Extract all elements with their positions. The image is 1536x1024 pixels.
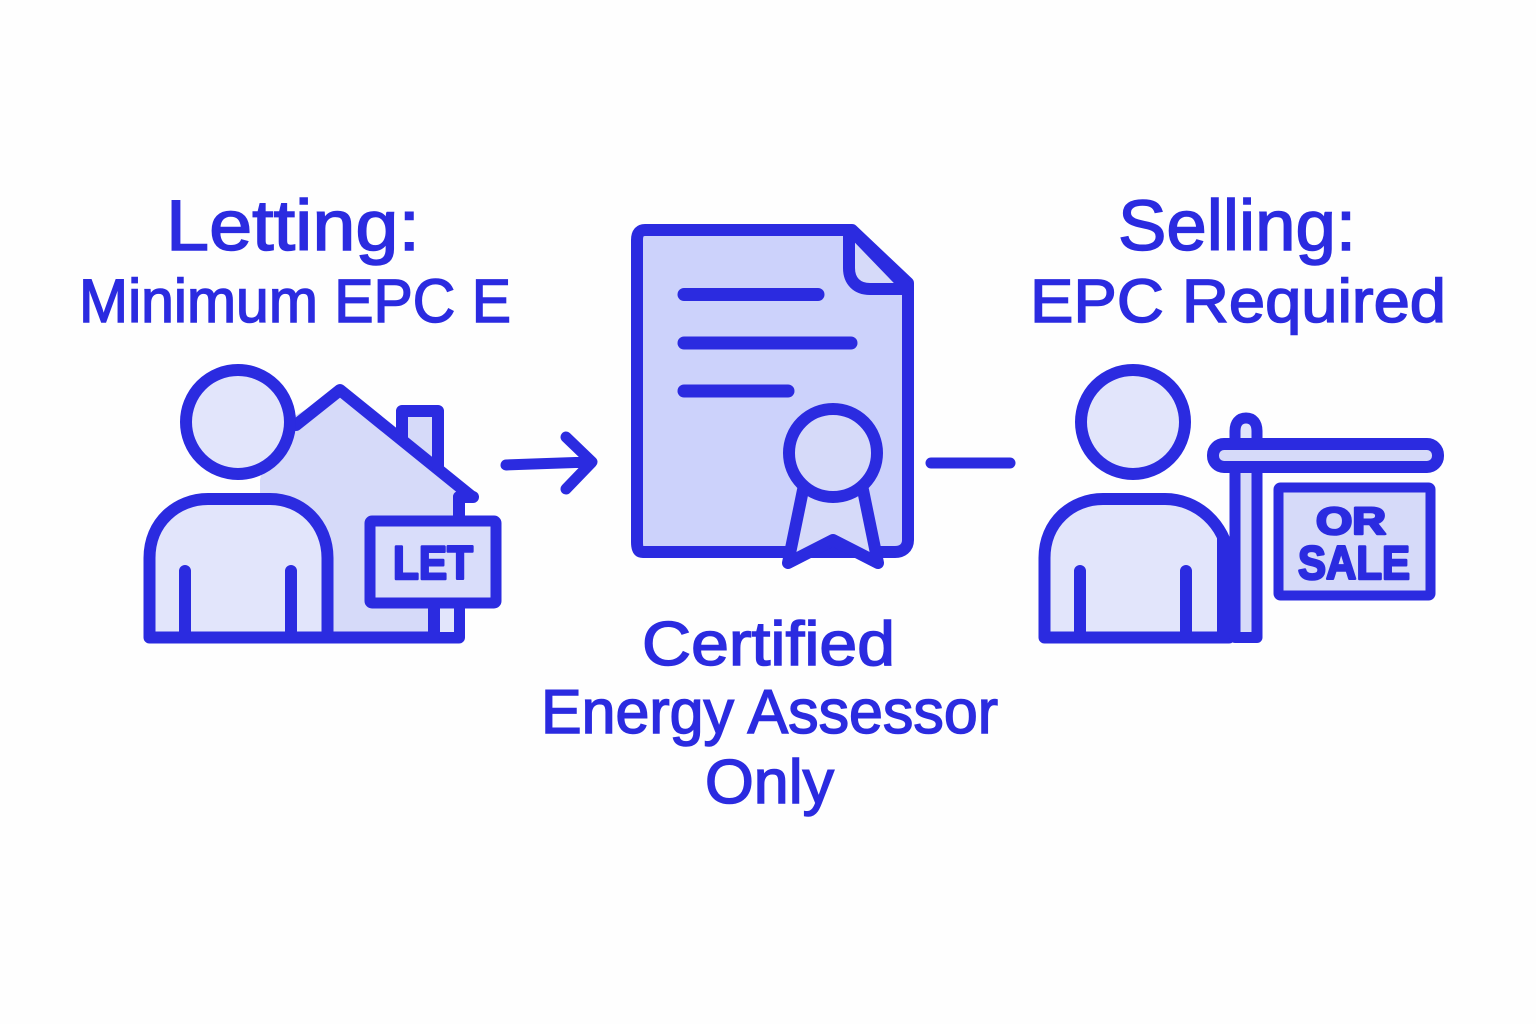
caption: certified energy assessor only	[541, 610, 998, 817]
icon: person body	[150, 499, 328, 638]
heading: selling: Selling:	[1118, 187, 1356, 266]
folded corner	[849, 231, 908, 289]
icon: landlord with house and let sign	[150, 370, 496, 638]
for sale sign: OR	[1316, 501, 1386, 543]
connector line	[931, 458, 1010, 468]
seal	[789, 409, 877, 497]
caption: certified energy assessor only: Only	[705, 748, 834, 817]
let sign: LET	[393, 536, 473, 589]
for sale sign	[1278, 488, 1430, 596]
sign post	[1213, 418, 1438, 638]
heading: letting	[79, 187, 511, 335]
for sale sign: SALE	[1298, 536, 1410, 589]
heading: letting: Letting:	[166, 187, 420, 266]
arrow: letting to certificate	[506, 437, 592, 489]
icon: person head	[1081, 370, 1185, 474]
text lines	[684, 294, 851, 391]
document sheet	[637, 230, 908, 552]
icon: seller with for sale sign	[1044, 370, 1438, 640]
icon: person head	[186, 370, 290, 474]
caption: certified energy assessor only: Energy Assessor	[541, 678, 998, 747]
let sign	[370, 521, 496, 603]
heading: selling: EPC Required	[1030, 267, 1446, 335]
caption: certified energy assessor only: Certified	[642, 610, 895, 679]
icon: house	[260, 390, 473, 638]
heading: letting: Minimum EPC E	[79, 267, 511, 335]
icon: person body	[1044, 499, 1236, 640]
ribbon	[788, 490, 878, 563]
icon: certificate document	[637, 230, 908, 563]
heading: selling	[1030, 187, 1446, 335]
